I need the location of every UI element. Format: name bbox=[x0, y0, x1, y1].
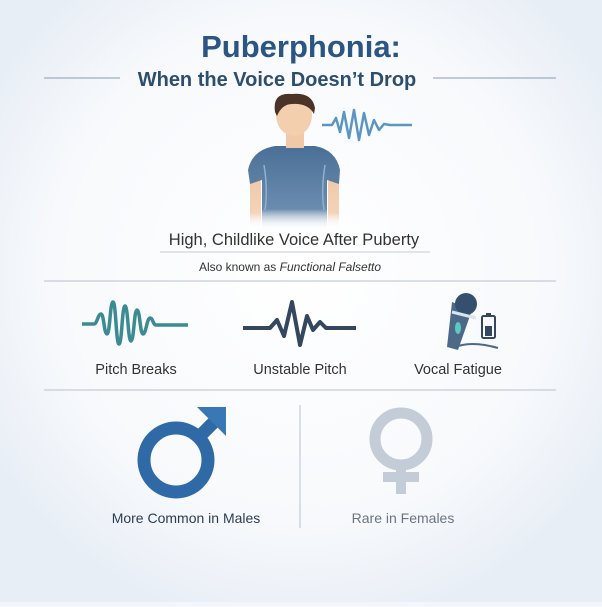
label: vocal fatigue: Vocal Fatigue bbox=[414, 362, 502, 378]
label: unstable pitch: Unstable Pitch bbox=[253, 362, 347, 378]
icon: unstable pitch bbox=[243, 302, 356, 345]
icon: pitch breaks wave bbox=[82, 302, 188, 344]
main caption: High, Childlike Voice After Puberty bbox=[169, 231, 420, 249]
icon: female symbol bbox=[375, 413, 427, 494]
panel: symptoms bbox=[82, 293, 502, 378]
label: females: Rare in Females bbox=[352, 510, 454, 526]
subcaption: Also known as Functional Falsetto bbox=[199, 260, 381, 274]
icon: male symbol bbox=[144, 407, 226, 492]
icon: microphone with battery bbox=[447, 293, 498, 350]
icon: voice wave bbox=[322, 110, 412, 140]
label: pitch breaks: Pitch Breaks bbox=[95, 362, 177, 378]
subtitle: When the Voice Doesn’t Drop bbox=[138, 69, 416, 91]
title bbox=[44, 29, 556, 91]
title: Puberphonia: bbox=[201, 29, 401, 64]
label: males: More Common in Males bbox=[112, 510, 260, 526]
panel: prevalence bbox=[112, 405, 454, 528]
illustration: person bbox=[248, 94, 340, 230]
